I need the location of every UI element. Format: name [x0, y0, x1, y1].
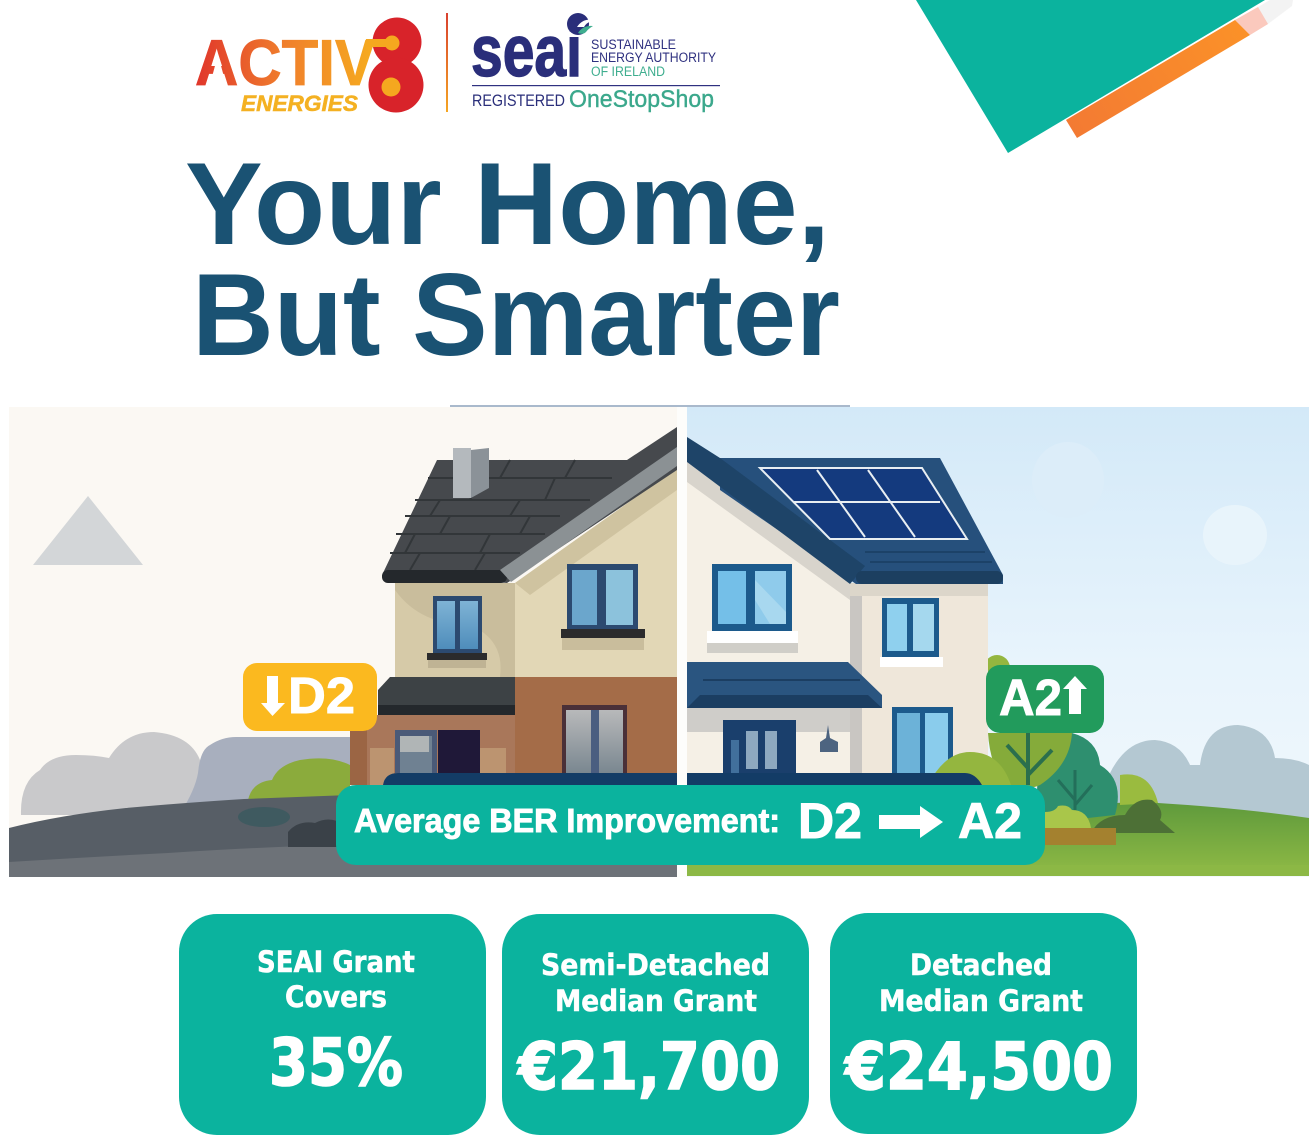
- BER improvement banner: [336, 785, 1045, 865]
- dark roof: [382, 427, 677, 583]
- logo swoosh dot: [567, 13, 593, 35]
- before and after divider: [677, 407, 687, 877]
- logo: Activ8 Energies: [195, 18, 424, 116]
- logo: SEAI registered One Stop Shop: [471, 12, 720, 113]
- badge: D2 rating: D2: [288, 667, 355, 724]
- stat card: SEAI grant covers: Covers: [285, 980, 387, 1014]
- cream walls: [687, 455, 988, 785]
- authority name: OF IRELAND: [591, 64, 665, 79]
- logo letter A crossbar mask: [212, 62, 224, 77]
- icon: up arrow: [1063, 676, 1087, 714]
- stat card: detached median grant: Detached: [910, 948, 1052, 982]
- stat card: SEAI grant covers: 35%: [269, 1026, 403, 1101]
- stat card: detached median grant: €24,500: [843, 1030, 1113, 1105]
- trees and bushes: [984, 655, 1175, 845]
- porch roof: [378, 677, 515, 715]
- upper right window: [561, 564, 645, 650]
- stat card: semi-detached median grant: [502, 914, 809, 1135]
- title: Your Home,: [185, 138, 830, 269]
- title: [185, 138, 840, 380]
- before side background: [9, 407, 677, 877]
- stat card: detached median grant: Median Grant: [879, 984, 1083, 1018]
- right window: [880, 598, 943, 667]
- logo figure 8: [366, 18, 424, 112]
- stat card: semi-detached median grant: €21,700: [516, 1030, 780, 1105]
- stat card: detached median grant: [830, 913, 1137, 1134]
- authority name: SUSTAINABLE: [591, 37, 676, 52]
- stat card: semi-detached median grant: Semi-Detached: [541, 948, 770, 982]
- upper left window: [707, 564, 798, 653]
- badge: A2 rating: A2: [999, 669, 1062, 726]
- wall lamp: [820, 725, 838, 752]
- BER improvement banner: D2: [798, 793, 862, 849]
- wall and brick sections: [350, 468, 677, 785]
- BER improvement banner: A2: [958, 793, 1022, 849]
- icon: down arrow: [261, 676, 285, 716]
- ground floor windows and door: [395, 705, 627, 773]
- house: before, unimproved: [350, 427, 677, 785]
- authority name: ENERGY AUTHORITY: [591, 50, 716, 65]
- house base strip: [383, 773, 982, 785]
- solar panels: [760, 468, 967, 539]
- illustration: house before and after: [9, 405, 1309, 877]
- authority name: [591, 37, 716, 79]
- upper left window: [427, 596, 487, 668]
- corner decoration: teal sheet and pencil: [916, 0, 1293, 153]
- stat card: SEAI grant covers: [179, 914, 486, 1135]
- stat card: semi-detached median grant: Median Grant: [555, 984, 757, 1018]
- icon: right arrow: [879, 806, 943, 838]
- front bush: [928, 752, 1011, 785]
- door: [723, 720, 796, 773]
- blue roof: [687, 437, 1003, 584]
- badge: A2 rating: [986, 665, 1104, 733]
- badge: D2 rating: [243, 663, 377, 731]
- logo wordmark seai: seai: [471, 12, 582, 92]
- lower right window: [892, 707, 953, 773]
- after side background: [687, 407, 1309, 877]
- title: But Smarter: [192, 249, 840, 380]
- stat card: SEAI grant covers: SEAI Grant: [257, 945, 415, 979]
- BER improvement banner: Average BER Improvement:: [354, 802, 780, 839]
- porch roof: [687, 662, 882, 708]
- registered label: REGISTERED: [472, 92, 565, 110]
- logo wordmark ACTIV: ACTIV: [195, 26, 375, 99]
- One Stop Shop label: OneStopShop: [569, 86, 714, 113]
- house: after, upgraded: [687, 437, 1011, 785]
- logo sub-wordmark ENERGIES: ENERGIES: [241, 91, 358, 116]
